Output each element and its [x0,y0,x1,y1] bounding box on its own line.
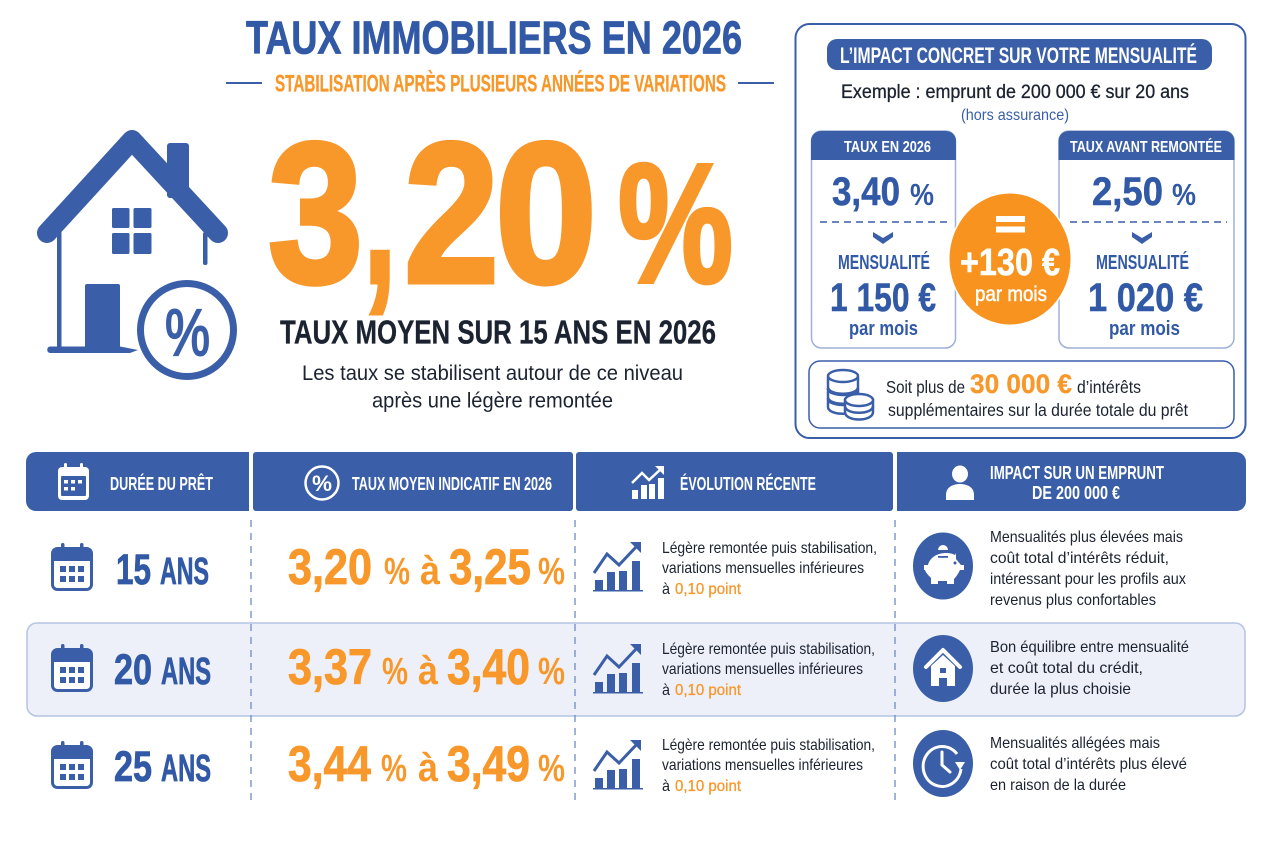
rate range: % [384,551,410,593]
evolution text: 0,10 point [675,778,742,795]
icon: growth chart [593,542,643,592]
impact text [990,639,1189,698]
impact text [990,529,1186,609]
example text: Exemple : emprunt de 200 000 € sur 20 ans [841,82,1189,103]
rate range [288,639,565,695]
evolution text: variations mensuelles inférieures [662,757,863,774]
card: rate before rise: 2,50 [1092,170,1163,214]
icon: house with percent: % [165,295,210,369]
subtitle: STABILISATION APRÈS PLUSIEURS ANNÉES DE VARIATIONS [275,70,726,98]
evolution text: à [662,778,670,795]
card: rate before rise: % [1172,177,1196,212]
callout: +130 euros per month: +130 € [960,242,1060,284]
rate range: à [420,549,441,593]
evolution text: variations mensuelles inférieures [662,560,864,577]
panel: impact on monthly payment [796,24,1246,438]
rate range: % [382,651,408,693]
duration [114,646,211,694]
title: TAUX IMMOBILIERS EN 2026 [246,12,742,64]
evolution text [662,540,877,598]
icon: percent circle: % [312,471,332,496]
callout: extra interest: 30 000 € [970,369,1072,399]
duration: 15 [116,546,151,594]
big rate figure: 2 [404,102,499,325]
table header: impact on loan [897,452,1246,511]
impact text: en raison de la durée [990,777,1126,794]
icon: growth chart [593,644,643,694]
rate range: % [538,651,565,693]
rate range: % [538,748,565,790]
rate range: % [381,748,407,790]
evolution text: 0,10 point [675,682,742,699]
card: rate 2026: 1 150 € [830,276,936,320]
table row: 20 years [52,635,1189,702]
card: rate 2026: par mois [849,318,918,340]
impact text: Mensualités plus élevées mais [990,529,1183,546]
impact text: durée la plus choisie [990,681,1131,698]
big rate figure: 0 [495,102,597,325]
rate description: Les taux se stabilisent autour de ce niveau [302,361,683,385]
table header: recent evolution [576,452,893,511]
card: rate before rise [1058,131,1234,348]
rate range: à [418,649,439,693]
big rate figure: 3 [268,102,363,325]
evolution text [662,737,875,795]
impact text: et coût total du crédit, [990,660,1143,677]
callout: +130 euros per month: par mois [975,283,1047,306]
icon: growth chart [632,466,664,499]
table row: 15 years [52,529,1186,609]
big rate figure: % [618,129,733,319]
callout: extra interest: d’intérêts [1077,377,1141,397]
rate range: % [538,551,565,593]
duration: 20 [114,646,152,694]
rate description [302,361,683,412]
card: rate before rise: par mois [1109,318,1180,340]
table header: indicative rate [253,452,573,511]
impact text [990,735,1187,794]
icon: house [913,635,973,702]
rate range: 3,49 [447,736,530,792]
card: rate before rise: MENSUALITÉ [1096,251,1189,274]
rate range: 3,40 [447,639,530,695]
table header: loan duration [26,452,249,511]
rate range [288,539,565,595]
impact text: Bon équilibre entre mensualité [990,639,1189,656]
callout: extra interest [809,361,1234,428]
duration: 25 [114,743,152,791]
evolution text: à [662,581,670,598]
evolution text: Légère remontée puis stabilisation, [662,737,875,754]
row band: 20 years background [27,623,1245,716]
big rate figure [268,102,733,325]
callout: extra interest: supplémentaires sur la durée totale du prêt [888,400,1188,420]
icon: coins [828,370,873,420]
card: rate 2026: % [910,177,934,212]
duration: ANS [161,748,211,790]
card: rate 2026: 3,40 [832,170,900,214]
impact text: coût total d’intérêts réduit, [990,550,1169,567]
table header: recent evolution: ÉVOLUTION RÉCENTE [680,473,816,494]
impact text: revenus plus confortables [990,592,1156,609]
icon: calendar [52,543,92,590]
table header: indicative rate: TAUX MOYEN INDICATIF EN 2026 [352,473,552,494]
impact text: coût total d’intérêts plus élevé [990,756,1187,773]
duration: ANS [161,651,211,693]
evolution text: Légère remontée puis stabilisation, [662,641,875,658]
table header: impact on loan: DE 200 000 € [1032,482,1120,503]
duration: ANS [160,551,209,593]
evolution text [662,641,875,699]
rate range: 3,44 [288,736,371,792]
rate range: 3,37 [288,639,372,695]
icon: clock with arrow [913,730,973,797]
rate caption: TAUX MOYEN SUR 15 ANS EN 2026 [280,314,716,350]
callout: +130 euros per month [948,192,1072,326]
icon: calendar [52,644,92,690]
rate range: 3,20 [288,539,372,595]
table row: 25 years [52,730,1187,797]
card: rate before rise: 1 020 € [1088,276,1203,320]
big rate figure: , [364,102,396,325]
rate range: 3,25 [449,539,531,595]
card: rate 2026: TAUX EN 2026 [844,139,931,156]
evolution text: 0,10 point [675,581,742,598]
impact text: Mensualités allégées mais [990,735,1160,752]
icon: person [946,466,974,500]
evolution text: variations mensuelles inférieures [662,661,863,678]
evolution text: Légère remontée puis stabilisation, [662,540,877,557]
rate description: après une légère remontée [372,388,613,412]
duration [116,546,209,594]
icon: percent circle [306,466,338,500]
icon: growth chart [593,740,643,790]
icon: house with percent [47,140,234,376]
icon: calendar [58,463,89,500]
evolution text: à [662,682,670,699]
note: (hors assurance) [961,107,1069,124]
table header: loan duration: DURÉE DU PRÊT [110,473,213,494]
table header: impact on loan: IMPACT SUR UN EMPRUNT [990,462,1164,483]
icon: calendar [52,741,92,788]
icon: piggy bank [913,532,973,600]
callout: extra interest: Soit plus de [886,377,965,397]
duration [114,743,211,791]
card: rate before rise: TAUX AVANT REMONTÉE [1070,137,1222,156]
card: rate 2026 [811,131,956,348]
card: rate 2026: MENSUALITÉ [838,251,930,274]
panel heading [827,39,1212,70]
rate range [288,736,565,792]
impact text: intéressant pour les profils aux [990,571,1186,588]
rate range: à [418,746,439,790]
